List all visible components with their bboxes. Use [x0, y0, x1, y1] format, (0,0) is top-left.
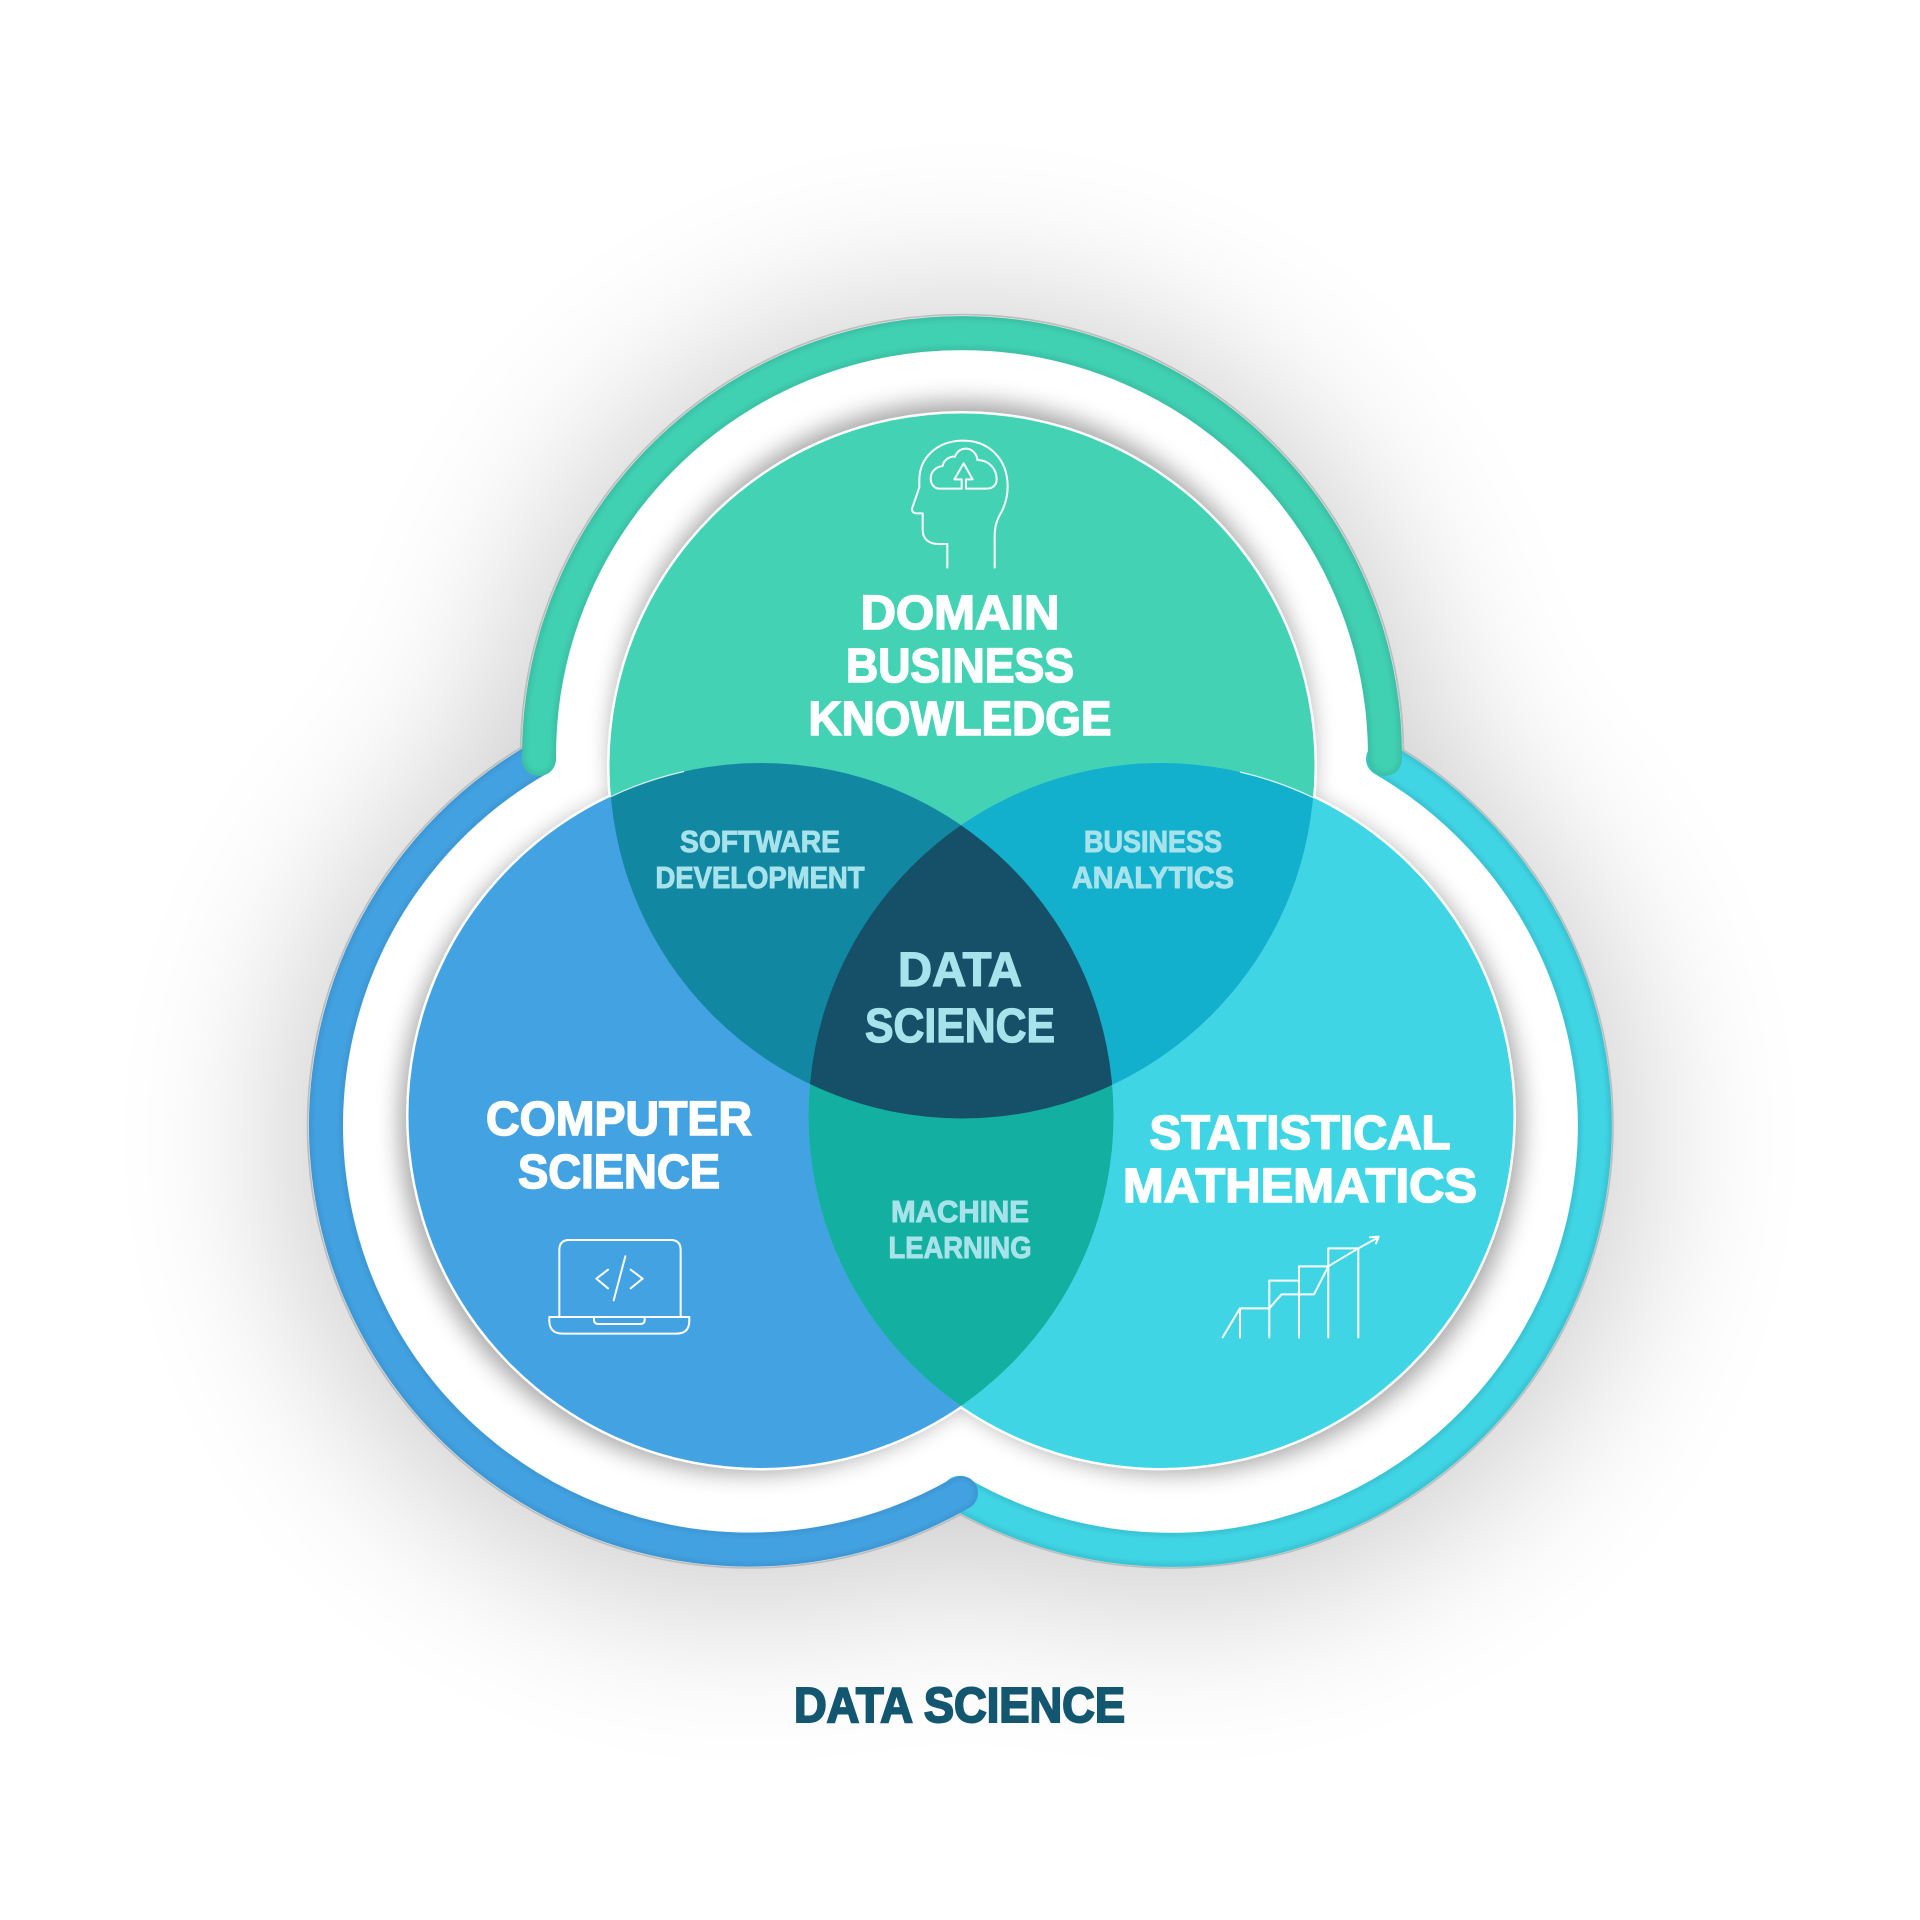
circle rims [406, 411, 1516, 1470]
label: software development: SOFTWARE [680, 824, 840, 859]
icon: growth chart [1223, 1237, 1379, 1337]
label: software development [656, 824, 865, 895]
circle: computer science [408, 763, 1114, 1468]
overlap: software development [611, 763, 961, 1084]
circle: statistical mathematics [808, 763, 1514, 1468]
overlap: data science center [810, 825, 1112, 1118]
label: business analytics [1072, 824, 1234, 895]
outer ring: computer science [326, 759, 961, 1550]
label: business analytics: BUSINESS [1084, 824, 1222, 859]
heading: domain business knowledge: KNOWLEDGE [808, 693, 1112, 746]
label: data science center [865, 944, 1055, 1053]
icon: laptop with code [549, 1240, 689, 1334]
overlap: machine learning [808, 826, 1114, 1406]
label: data science center: SCIENCE [865, 1000, 1055, 1053]
heading: domain business knowledge [808, 587, 1112, 746]
outer ring: domain knowledge [539, 333, 1385, 759]
heading: statistical mathematics: MATHEMATICS [1123, 1160, 1477, 1213]
label: machine learning [888, 1194, 1032, 1265]
white base shape [340, 346, 1581, 1536]
circle: domain business knowledge [610, 414, 1314, 1118]
label: machine learning: MACHINE [891, 1194, 1029, 1229]
label: software development: DEVELOPMENT [656, 860, 865, 895]
outer ring: statistical mathematics [959, 759, 1595, 1550]
heading: statistical mathematics: STATISTICAL [1150, 1107, 1450, 1160]
overlap: business analytics [961, 763, 1313, 1085]
label: machine learning: LEARNING [888, 1230, 1032, 1265]
label: data science center: DATA [898, 944, 1022, 997]
background soft shadow [284, 303, 1636, 1603]
heading: computer science [486, 1093, 752, 1199]
circle shadows [400, 402, 1522, 1473]
label: business analytics: ANALYTICS [1072, 860, 1234, 895]
heading: statistical mathematics [1123, 1107, 1477, 1213]
icon: head with cloud upload [912, 441, 1008, 568]
heading: computer science: SCIENCE [518, 1146, 720, 1199]
outer hairline [308, 314, 1613, 1568]
heading: domain business knowledge: BUSINESS [846, 640, 1074, 693]
title: DATA SCIENCE [794, 1679, 1125, 1733]
venn diagram [408, 414, 1514, 1468]
heading: domain business knowledge: DOMAIN [860, 587, 1060, 640]
heading: computer science: COMPUTER [486, 1093, 752, 1146]
